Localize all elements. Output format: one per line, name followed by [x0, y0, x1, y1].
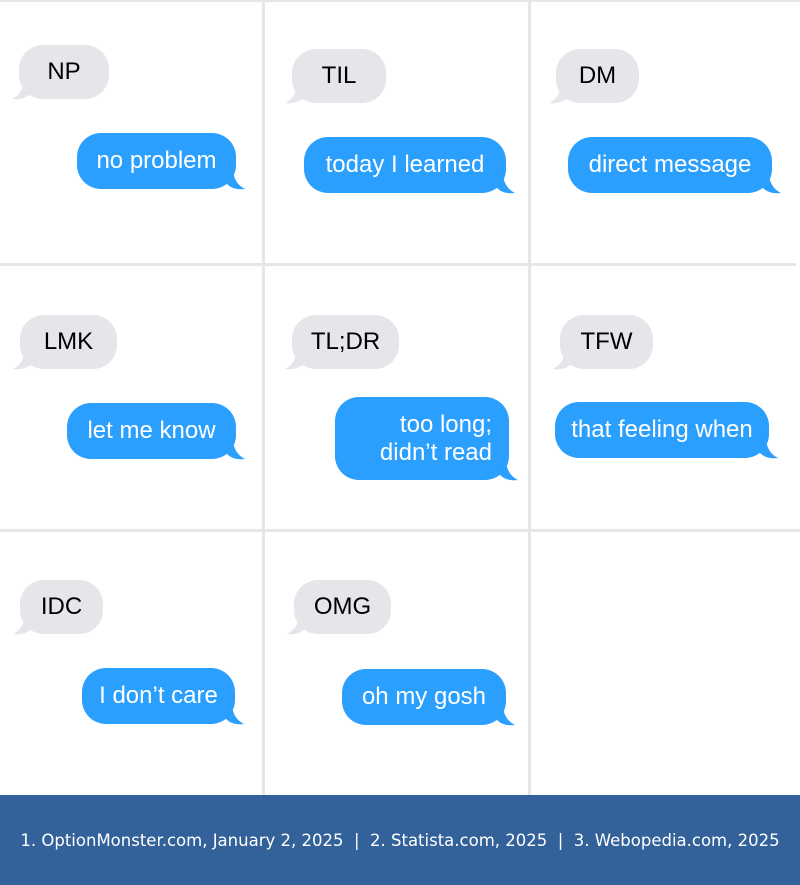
bubble: IDC [20, 580, 103, 634]
bubble: no problem [77, 133, 236, 189]
bubble: IDC: IDC [41, 593, 82, 620]
panel: LMK [14, 315, 245, 460]
bubble: let me know [67, 403, 236, 459]
bubble: TIL: TIL [322, 62, 356, 89]
bubble: LMK: LMK [44, 328, 93, 355]
bubble: let me know: let me know [87, 417, 216, 444]
panel: TFW [554, 315, 778, 458]
bubble: today I learned [304, 137, 506, 193]
bubble: that feeling when: that feeling when [571, 416, 753, 443]
bubble: TFW: TFW [580, 328, 632, 355]
panel: TIL [286, 49, 515, 194]
panel: IDC [14, 580, 244, 724]
bubble: too long; didn't read: too long; [400, 410, 492, 438]
bubble: oh my gosh: oh my gosh [362, 683, 486, 710]
bubble: oh my gosh [342, 669, 506, 725]
panel: TL;DR [286, 315, 518, 480]
bubble: TFW [560, 315, 653, 369]
bubble: OMG: OMG [314, 593, 371, 620]
panel: DM [550, 49, 781, 194]
bubble: LMK [20, 315, 117, 369]
bubble: NP: NP [47, 58, 81, 85]
bubble: too long; didn't read [335, 397, 509, 480]
bubble: OMG [294, 580, 391, 634]
panel: NP [12, 45, 245, 190]
bubble: DM: DM [579, 62, 616, 89]
bubble: direct message: direct message [589, 151, 751, 178]
bubble: that feeling when [555, 402, 769, 458]
panel: OMG [288, 580, 515, 726]
bubble: TIL [292, 49, 386, 103]
bubble: no problem: no problem [96, 147, 217, 174]
bubble: NP [19, 45, 109, 99]
footer: sources [0, 795, 800, 885]
bubble: direct message [568, 137, 772, 193]
footer: sources: 1. OptionMonster.com, January 2, 2025 | 2. Statista.com, 2025 | 3. Webopedia.com, 2025 [20, 830, 780, 850]
bubble: too long; didn't read: didn’t read [380, 438, 492, 466]
bubble: DM [556, 49, 639, 103]
bubble: today I learned: today I learned [326, 151, 484, 178]
bubble: I don't care [82, 668, 235, 724]
bubble: TL;DR: TL;DR [311, 328, 380, 355]
bubble: TL;DR [292, 315, 399, 369]
bubble: I don't care: I don’t care [99, 682, 218, 709]
